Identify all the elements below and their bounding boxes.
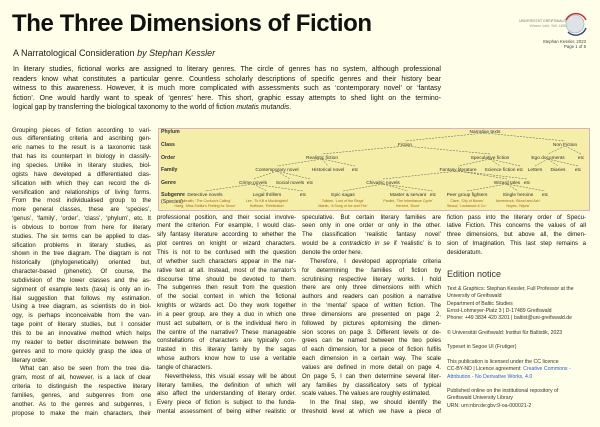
text column: middle-left: professional position, and their social involve-: [157, 214, 296, 221]
text column: middle-right: for determining the families of fiction by: [302, 267, 441, 274]
tree diagram: etc: [578, 155, 585, 161]
tree diagram: etc: [307, 180, 314, 186]
text column: middle-right: threshold level at which we have a piece of: [302, 408, 441, 415]
text column: left: propose to make the main characters, their: [12, 410, 151, 417]
text column: left: ing species. Unlike in literary studies, biol-: [12, 162, 151, 169]
tree diagram: Lee, ‘To Kill a Mockingbird’: [246, 199, 288, 203]
tree diagram: etc: [300, 192, 307, 198]
text column: middle-left: mental assessment of being either realistic or: [157, 408, 296, 415]
text column: left: ogists have developed a differentiated clas-: [12, 171, 151, 178]
edition notice details: This publication is licensed under the CC licence: [447, 359, 559, 365]
text column: left: that has its counterpart in biology in classify-: [12, 153, 151, 160]
text column: middle-right: authors and readers can position a narrative: [302, 293, 441, 300]
tree diagram: Wizard tales: [494, 180, 521, 186]
tree diagram: Peer group fighters: [447, 192, 488, 198]
edition notice details: Text & Graphics: Stephan Kessler, Full Professor at the: [447, 286, 574, 292]
text column: left: is obvious to borrow from here for literary: [12, 224, 151, 231]
text column: middle-right: In the final step, we should identify the: [310, 399, 441, 406]
edition notice details: Attribution - No Derivative Works, 4.0: [447, 374, 532, 380]
tree diagram: Diaries: [551, 167, 566, 173]
text column: left: historically (phylogenetically) oriented but,: [12, 259, 151, 266]
tree diagram: Fantasy literature: [439, 167, 477, 173]
tree diagram: Detective novels: [187, 192, 223, 198]
text column: middle-left: ment the criterion. For example, I would clas-: [157, 222, 296, 229]
text column: middle-left: [157, 214, 296, 415]
tree diagram: etc: [524, 180, 531, 186]
tree diagram: Paolini, ‘The Inheritance Cycle’: [383, 199, 433, 203]
text column: left: criteria to distinguish the respective literary: [12, 383, 151, 390]
logo: university: UNIVERSITÄT GREIFSWALD: [519, 19, 566, 23]
text column: middle-right: On page 5, I can then determine several liter-: [302, 373, 441, 380]
text column: middle-left: The subgenres then result from the question: [157, 284, 296, 291]
tree diagram: Historical novel: [312, 167, 344, 173]
tree diagram: Order: [161, 155, 175, 161]
text column: left: studies. The six terms can be applied to clas-: [12, 233, 151, 240]
text column: right: [447, 214, 586, 256]
text column: right: three dimensions, but above all, the dimen-: [447, 231, 586, 238]
tree diagram: Høeg, ‘Miss Smilla’s Feeling for Snow’: [174, 204, 236, 208]
intro paragraph: witness to this awareness. However, it is much more complicated with assessments such as ‘contemporary novel’ or ‘fantasy: [13, 85, 441, 92]
text column: left: this to be an innovative method which helps: [12, 330, 151, 337]
heading: edition notice: Edition notice: [447, 269, 501, 279]
text column: middle-left: tangle of characters.: [157, 364, 212, 371]
text column: left: ogy, is perhaps inconceivable from the van-: [12, 312, 151, 319]
text column: middle-left: plot centres on knight or wizard characters.: [157, 240, 296, 247]
text column: left: families, genres, and subgenres from one: [12, 392, 151, 399]
text column: middle-right: values are defined in more detail on page 4.: [302, 364, 441, 371]
edition notice details: © Universität Greifswald: Institut für Baltistik, 2023: [447, 330, 562, 336]
text column: left: tage point of literary studies, but I consider: [12, 321, 151, 328]
text column: middle-left: in a peer group, are they a duo in which one: [157, 311, 296, 318]
text column: left: itial suggestion that follows my estimation.: [12, 295, 151, 302]
text column: left: What can also be seen from the tree dia-: [20, 365, 151, 372]
tree diagram: Noyes, ‘Nijura’: [506, 204, 530, 208]
tree diagram: Tolkien, ‘Lord of the Rings’: [322, 199, 364, 203]
intro paragraph: logical gap by transferring the biological taxonomy to the world of fiction mutatis mutandis.: [13, 104, 291, 111]
tree diagram: Ego documents: [531, 155, 565, 161]
tree diagram: Master & servant: [390, 192, 427, 198]
title: The Three Dimensions of Fiction: [12, 10, 372, 37]
text column: left: signment of example texts (taxa) is only an in-: [12, 286, 151, 293]
tree diagram: Subgenre: [161, 192, 185, 198]
tree diagram: Non Fiction: [553, 142, 577, 148]
text column: middle-right: sion scores on page 3. Different levels or de-: [302, 329, 441, 336]
text column: middle-left: must act subaltern, or is the individual hero in: [157, 320, 296, 327]
tree diagram: Legal thrillers: [253, 192, 282, 198]
tree diagram: Family: [161, 167, 178, 173]
text column: middle-right: three dimensions are presented on page 2,: [302, 311, 441, 318]
edition notice details: CC-BY-ND | Licence agreement: Creative Commons -: [447, 366, 571, 372]
tree diagram: Epic sagas: [331, 192, 355, 198]
text column: left: character-based (phenetic). Of course, the: [12, 268, 151, 275]
tree diagram: Armentrout, ‘Blood and Ash’: [496, 199, 540, 203]
tree diagram: Stroud, ‘Lockwood & Co.’: [447, 204, 487, 208]
text column: left: sification with which they can record the di-: [12, 180, 151, 187]
text column: right: fiction pass into the literary order of Specu-: [447, 214, 586, 221]
tree diagram: [158, 128, 590, 211]
subtitle: A Narratological Consideration by Stephan Kessler: [13, 48, 215, 58]
tree diagram: Chivalric novels: [366, 180, 400, 186]
text column: left: more general classes, these are ‘species’,: [12, 206, 151, 213]
intro paragraph: fiction’. One would hardly want to speak of ‘genres’ here. This short, graphic essay attempts to shed light on the termino-: [13, 95, 441, 102]
tree diagram: Phylum: [161, 129, 180, 135]
text column: left: ‘genus’, ‘family’, ‘order’, ‘class’, ‘phylum’, etc. It: [12, 215, 151, 222]
text column: middle-left: of the social context in which the fictional: [157, 293, 296, 300]
text column: left: From the most individualised group to the: [12, 197, 151, 204]
text column: middle-right: scrutinising respective literary works. I hold: [302, 276, 441, 282]
text column: left: [12, 127, 151, 417]
text column: middle-right: ary families by classificatory sets of typical: [302, 382, 441, 389]
tree diagram: Realistic fiction: [306, 155, 338, 161]
text column: left: Using a tree diagram, as scientists do in biol-: [12, 303, 151, 310]
text column: middle-right: followed by pictures epitomising the dimen-: [302, 320, 441, 327]
text column: middle-right: each dimension in a certain way. The scale: [302, 355, 441, 362]
text column: middle-left: of whether such characters appear in the nar-: [157, 258, 296, 265]
text column: left: eric names to the result is a taxonomic task: [12, 144, 151, 151]
text column: middle-left: knights or wizards act. Do they work together: [157, 302, 296, 309]
text column: left: gram, most of all, however, is a lack of clear: [12, 374, 151, 381]
tree diagram: (Species): [161, 199, 183, 205]
text column: middle-left: the centre of the narrative? These manageable: [157, 329, 296, 336]
text column: left: literary order.: [12, 357, 48, 364]
tree diagram: Single heroine: [503, 192, 534, 198]
tree diagram: Letters: [528, 167, 543, 173]
text column: middle-left: discourse time should be devoted to them.: [157, 276, 296, 282]
logo: university: Wissen lockt. Seit 1456: [530, 24, 566, 28]
tree diagram: Crime novels: [239, 180, 268, 186]
text column: middle-right: of each dimension, for a piece of fiction fulfils: [302, 346, 441, 353]
text column: middle-right: denote the order here.: [302, 249, 362, 256]
tree diagram: Social novels: [276, 180, 305, 186]
author/page note: Stephan Kessler, 2023: [543, 39, 586, 44]
text column: right: lative Fiction. This concerns the values of all: [447, 222, 586, 229]
tree diagram: Herbert, ‘Dune’: [396, 204, 420, 208]
edition notice details: Department of Baltic Studies: [447, 301, 513, 307]
author/page note: [543, 39, 586, 49]
text column: middle-right: speculative. But certain literary families are: [302, 214, 441, 221]
text column: middle-left: constellations of characters are typically con-: [157, 337, 296, 344]
edition notice details: Greifswald University Library: [447, 395, 513, 401]
text column: middle-right: in the ‘mental’ space of written fiction. The: [302, 302, 441, 309]
tree diagram: Martin, ‘A Song of Ice and Fire’: [318, 204, 368, 208]
edition notice details: Typeset in Segoe UI (Frutiger): [447, 344, 516, 350]
text column: middle-left: rative text at all. Instead, most of the narrator’s: [157, 267, 296, 274]
text column: left: genres and to more quickly grasp the idea of: [12, 348, 151, 355]
text column: middle-right: there are only three dimensions with which: [302, 284, 441, 291]
tree diagram: etc: [352, 167, 359, 173]
text column: left: another. As to the genres and subgenres, I: [12, 401, 151, 408]
edition notice details: University of Greifswald: [447, 293, 501, 299]
intro paragraph: In literary studies, fictional works are assigned to literary genres. The circle of genres has no system, although professional: [13, 66, 441, 73]
tree diagram: etc: [517, 167, 524, 173]
tree diagram: Contemporary novel: [255, 167, 299, 173]
tree diagram: Hoffman, ‘Retribution’: [250, 204, 284, 208]
text column: middle-left: This is not to be confused with the question: [157, 249, 296, 256]
edition notice details: Ernst-Lohmeyer-Platz 3 | D-17489 Greifswald: [447, 308, 552, 314]
text column: middle-left: literary families, the definition of which will: [157, 382, 296, 389]
text column: left: sification problems in literary studies, as: [12, 242, 151, 249]
text column: middle-left: whose authors know how to use a veritable: [157, 355, 296, 362]
intro paragraph: [13, 66, 441, 111]
text column: middle-right: [302, 214, 441, 415]
text column: middle-left: sify fantasy literature according to whether the: [157, 231, 296, 238]
text column: right: sion of Imagination. This last step remains a: [447, 240, 586, 247]
logo: university: [519, 12, 587, 36]
text column: left: my reader to better discriminate between the: [12, 339, 151, 346]
edition notice details: Phone: +49 3834 420 3201 | baltist@uni-greifswald.de: [447, 315, 572, 321]
tree diagram: Genre: [161, 180, 176, 186]
edition notice details: Published online on the institutional repository of: [447, 388, 558, 394]
text column: right: desideratum.: [447, 249, 482, 256]
tree diagram: etc: [430, 192, 437, 198]
text column: middle-left: trasted in this literary family by the sagas: [157, 346, 296, 353]
tree diagram: etc: [575, 167, 582, 173]
text column: middle-left: Nevertheless, this visual essay will be about: [165, 373, 296, 380]
tree diagram: Science fiction: [485, 167, 516, 173]
tree diagram: Class: [161, 142, 175, 148]
edition notice details: [447, 286, 574, 409]
text column: middle-right: seen only in one order or only in the other.: [302, 222, 441, 229]
tree diagram: Fiction: [398, 142, 412, 148]
text column: middle-right: The classification ‘realistic fantasy novel’: [302, 231, 441, 238]
tree diagram: Speculative fiction: [471, 155, 510, 161]
text column: left: Grouping pieces of fiction according to vari-: [12, 127, 151, 134]
text column: left: shown in the tree diagram. The diagram is not: [12, 250, 151, 257]
edition notice details: URN: urn:nbn:de:gbv:9-oa-000021-2: [447, 403, 531, 409]
text column: middle-right: Therefore, I developed appropriate criteria: [310, 258, 441, 265]
tree diagram: etc: [542, 192, 549, 198]
text column: middle-right: grees can be named between the two poles: [302, 337, 441, 344]
intro paragraph: readers know what constitutes a particular genre. Countless scholarly descriptions of specific genres and their history bear: [13, 76, 441, 83]
tree diagram: Galbraith, ‘The Cuckoo’s Calling’: [179, 199, 231, 203]
text column: middle-left: Every piece of fiction is subject to the funda-: [157, 399, 296, 406]
text column: left: versification and relationships of living forms.: [12, 188, 151, 196]
text column: middle-right: would be a contradictio in se if ‘realistic’ is to: [302, 240, 441, 247]
author/page note: Page 1 of 5: [564, 44, 586, 49]
tree diagram: Clare, ‘City of Bones’: [450, 199, 484, 203]
tree diagram: Narrative texts: [470, 129, 501, 135]
text column: middle-left: also affect the understanding of literary order.: [157, 390, 296, 397]
text column: left: subdivision of the lower classes and the as-: [12, 277, 151, 284]
text column: left: ous differentiating criteria and ascribing gen-: [12, 135, 151, 142]
text column: middle-right: scale values. The values are roughly estimated.: [302, 390, 431, 397]
